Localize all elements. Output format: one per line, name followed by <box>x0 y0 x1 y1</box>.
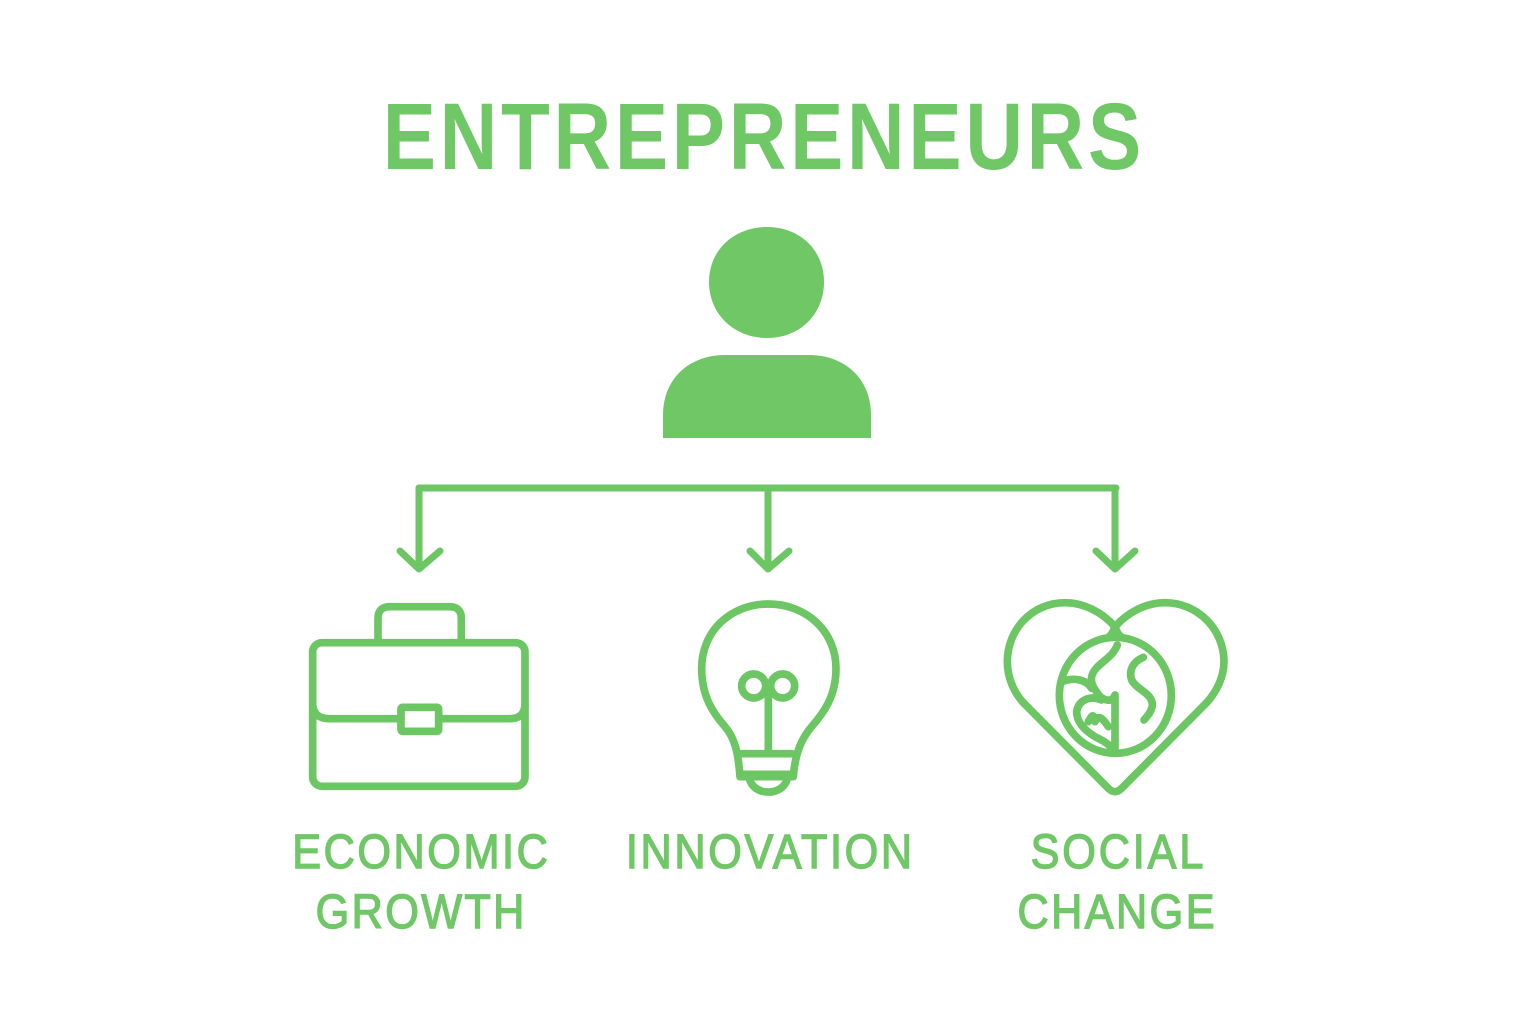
label: economic growth <box>292 825 548 939</box>
label: innovation: INNOVATION <box>626 825 912 879</box>
label: economic growth: ECONOMIC <box>292 825 548 879</box>
arrow: to innovation <box>750 488 789 569</box>
icon: light bulb <box>702 604 836 792</box>
label: social change <box>1017 825 1215 939</box>
arrow: to social change <box>1096 488 1135 569</box>
connector arrows <box>400 488 1135 569</box>
label: social change: CHANGE <box>1017 885 1215 939</box>
arrow: to economic growth <box>400 488 440 569</box>
icon: briefcase <box>313 607 525 786</box>
icon: heart with globe <box>1007 603 1224 792</box>
title: ENTREPRENEURS <box>383 83 1141 190</box>
label: economic growth: GROWTH <box>316 885 524 939</box>
connector: horizontal branch <box>419 484 1116 492</box>
icon: entrepreneur person <box>663 227 871 438</box>
label: social change: SOCIAL <box>1031 825 1203 879</box>
